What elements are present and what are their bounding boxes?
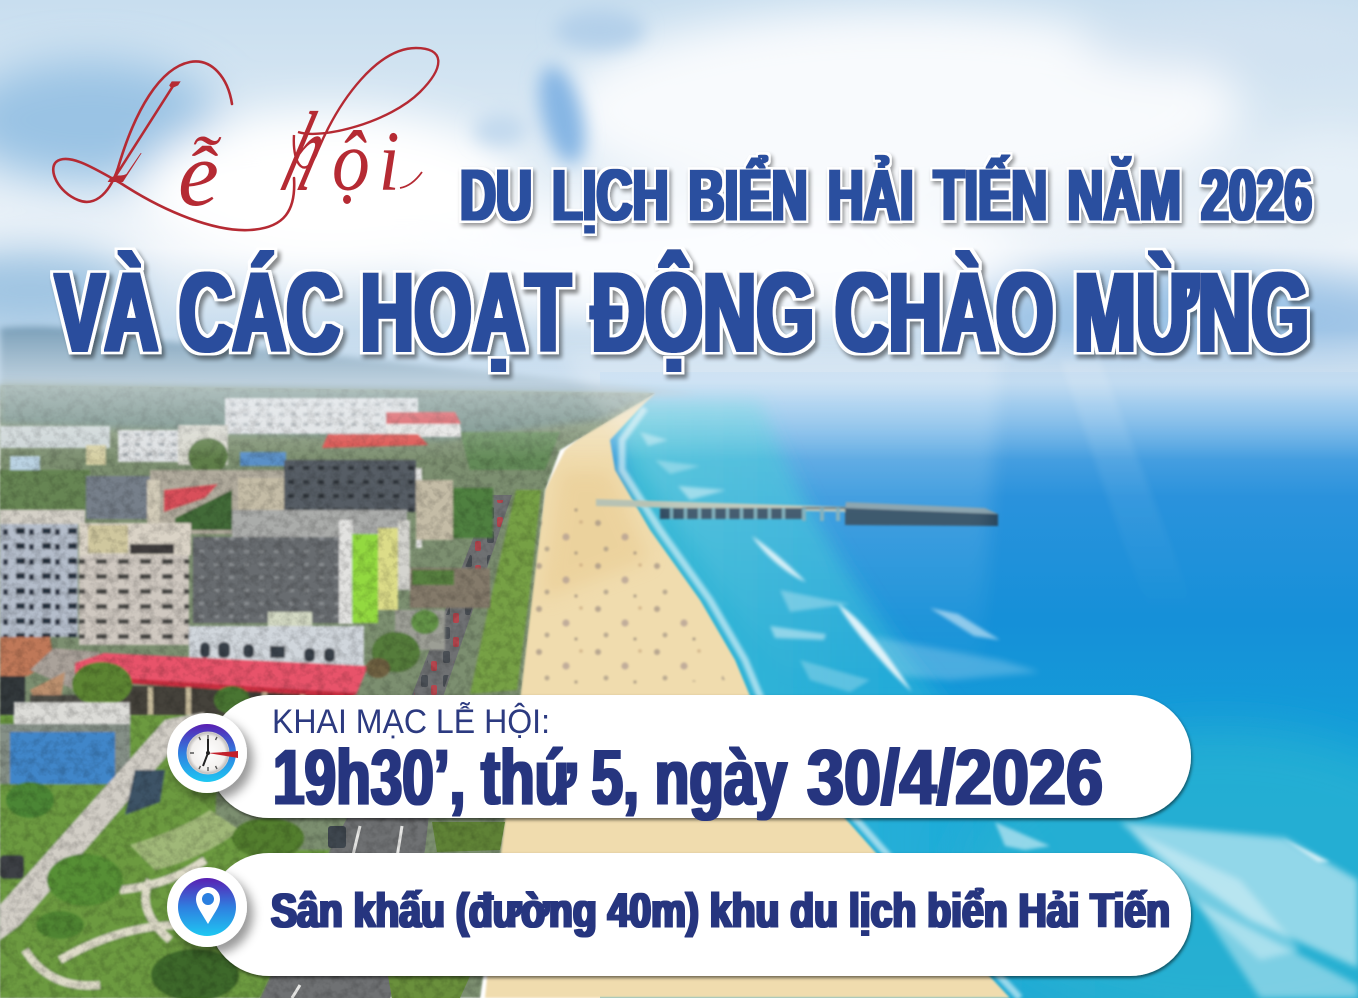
date and time: 19h30’, thứ 5, ngày	[273, 733, 787, 821]
pill background	[208, 695, 1191, 818]
letter h: h	[270, 89, 342, 215]
blue gap between clouds	[474, 10, 645, 168]
foam waves	[640, 432, 1330, 862]
flourish: tail of the i	[400, 172, 422, 188]
distant mountain	[0, 326, 700, 400]
pier	[596, 499, 998, 526]
beach	[485, 393, 1010, 998]
land behind town	[0, 385, 655, 998]
shore foam line	[622, 408, 1020, 998]
lower left park and pool	[0, 702, 330, 998]
icon: clock	[167, 713, 247, 793]
icon: map pin	[167, 867, 247, 947]
panel: location	[167, 853, 1191, 976]
label: opening ceremony: KHAI MẠC LỄ HỘI:	[272, 703, 550, 741]
sea	[600, 372, 1358, 998]
date and time: 30/4/2026	[807, 733, 1103, 821]
palm row	[470, 490, 541, 694]
pill background	[208, 853, 1191, 976]
clouds and blue sky patches	[0, 10, 1358, 370]
road	[260, 495, 512, 998]
venue text: Sân khấu (đường 40m) khu du lịch biển Hải Tiến	[271, 885, 1170, 938]
photo grain on town	[0, 385, 660, 998]
letter e with circumflex and tilde: ễ	[178, 123, 222, 225]
letter L: L	[87, 45, 208, 215]
town buildings	[0, 398, 493, 716]
letters oi: ội	[332, 114, 408, 209]
script heading: Lễ hội with flourishes	[53, 45, 438, 230]
flourish: swash of the L	[53, 61, 294, 230]
haze over the horizon	[0, 330, 1358, 460]
panel: opening time	[167, 695, 1191, 821]
flourish: loop of the h	[294, 48, 438, 167]
